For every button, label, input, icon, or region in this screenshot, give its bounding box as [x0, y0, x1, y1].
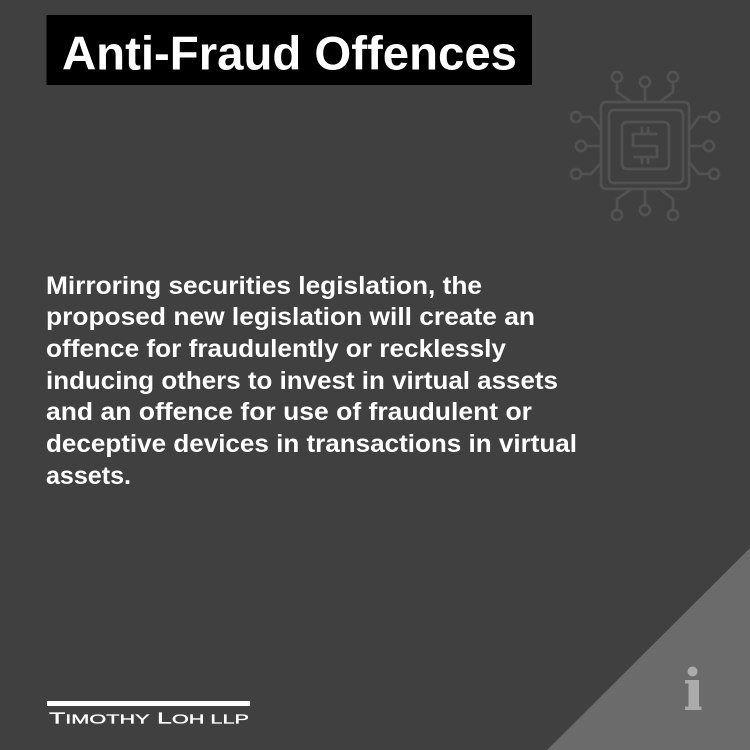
body text: deceptive devices in transactions in virtual — [46, 430, 577, 458]
icon: information letter i — [685, 666, 702, 710]
body text: Mirroring securities legislation, the — [46, 272, 482, 300]
body text: inducing others to invest in virtual assets — [46, 367, 558, 395]
body text: proposed new legislation will create an — [46, 303, 535, 331]
corner triangle — [547, 548, 750, 750]
title banner: Anti-Fraud Offences — [62, 26, 517, 80]
logo: Timothy Loh LLP: T IMOTHY L OH LLP — [49, 710, 249, 728]
logo: Timothy Loh LLP — [47, 701, 250, 728]
body text: assets. — [46, 462, 131, 490]
body text — [46, 272, 577, 490]
body text: and an offence for use of fraudulent or — [46, 398, 532, 426]
icon: crypto chip with dollar sign — [571, 72, 719, 220]
body text: offence for fraudulently or recklessly — [46, 335, 506, 363]
